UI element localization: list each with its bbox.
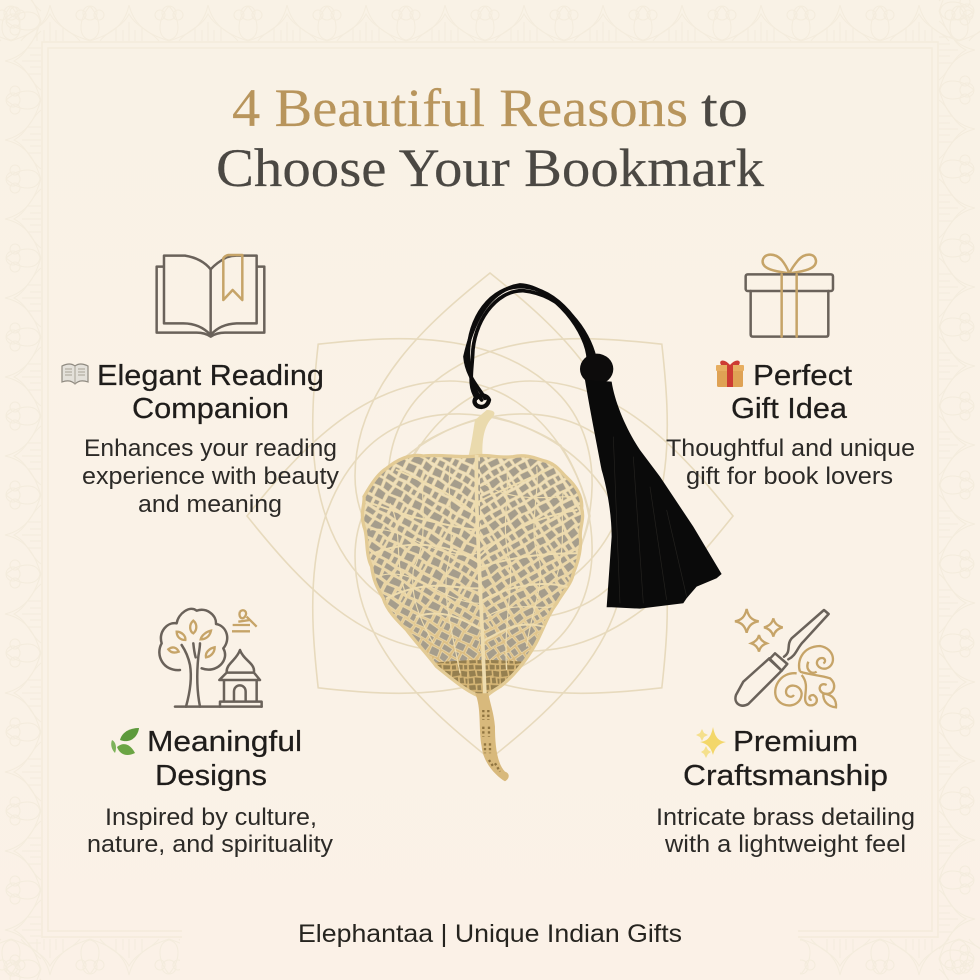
panel: elegant reading companion: Elegant Reading — [97, 360, 324, 392]
panel: elegant reading companion: Companion — [132, 393, 289, 425]
panel: premium craftsmanship: with a lightweight feel — [664, 831, 906, 858]
icon: sparkles emoji — [696, 727, 726, 758]
icon: carving tool with sparkles and filigree — [735, 609, 836, 707]
icon: herb emoji — [111, 728, 139, 755]
tassel — [580, 354, 722, 609]
title: 4 Beautiful Reasons — [232, 78, 688, 138]
icon: tree and temple — [159, 609, 262, 707]
panel: perfect gift idea: Perfect — [753, 360, 852, 392]
icon: open book with bookmark — [157, 255, 264, 337]
panel: perfect gift idea: gift for book lovers — [686, 463, 893, 490]
panel: perfect gift idea — [666, 360, 915, 490]
mandala line art behind bookmark — [223, 249, 757, 783]
title — [216, 78, 764, 198]
panel: elegant reading companion — [62, 360, 339, 518]
cord loop — [465, 285, 595, 407]
icon: gift box — [746, 255, 833, 337]
panel: perfect gift idea: Gift Idea — [731, 393, 848, 425]
footer brand line: Elephantaa | Unique Indian Gifts — [298, 920, 682, 948]
panel: premium craftsmanship: Premium — [733, 726, 858, 758]
title: Choose Your Bookmark — [216, 138, 764, 198]
panel: meaningful designs: Inspired by culture, — [105, 804, 317, 831]
bookmark: gold leaf with black tassel — [353, 285, 722, 781]
panel: meaningful designs: Meaningful — [147, 726, 302, 758]
panel: premium craftsmanship: Intricate brass detailing — [656, 804, 915, 831]
panel: elegant reading companion: Enhances your reading — [84, 435, 337, 462]
panel: perfect gift idea: Thoughtful and unique — [666, 435, 915, 462]
icon: gift emoji — [716, 360, 744, 387]
icon: open book emoji — [62, 364, 88, 384]
panel: premium craftsmanship: Craftsmanship — [683, 760, 888, 792]
leaf stem top — [468, 410, 494, 458]
title: to — [701, 78, 748, 138]
leaf lower stem — [475, 693, 509, 781]
panel: elegant reading companion: and meaning — [138, 491, 282, 518]
panel: premium craftsmanship — [656, 726, 915, 858]
leaf body — [360, 454, 584, 697]
panel: meaningful designs: nature, and spirituality — [87, 831, 333, 858]
panel: meaningful designs — [87, 726, 333, 858]
panel: meaningful designs: Designs — [155, 760, 267, 792]
panel: elegant reading companion: experience with beauty — [82, 463, 339, 490]
